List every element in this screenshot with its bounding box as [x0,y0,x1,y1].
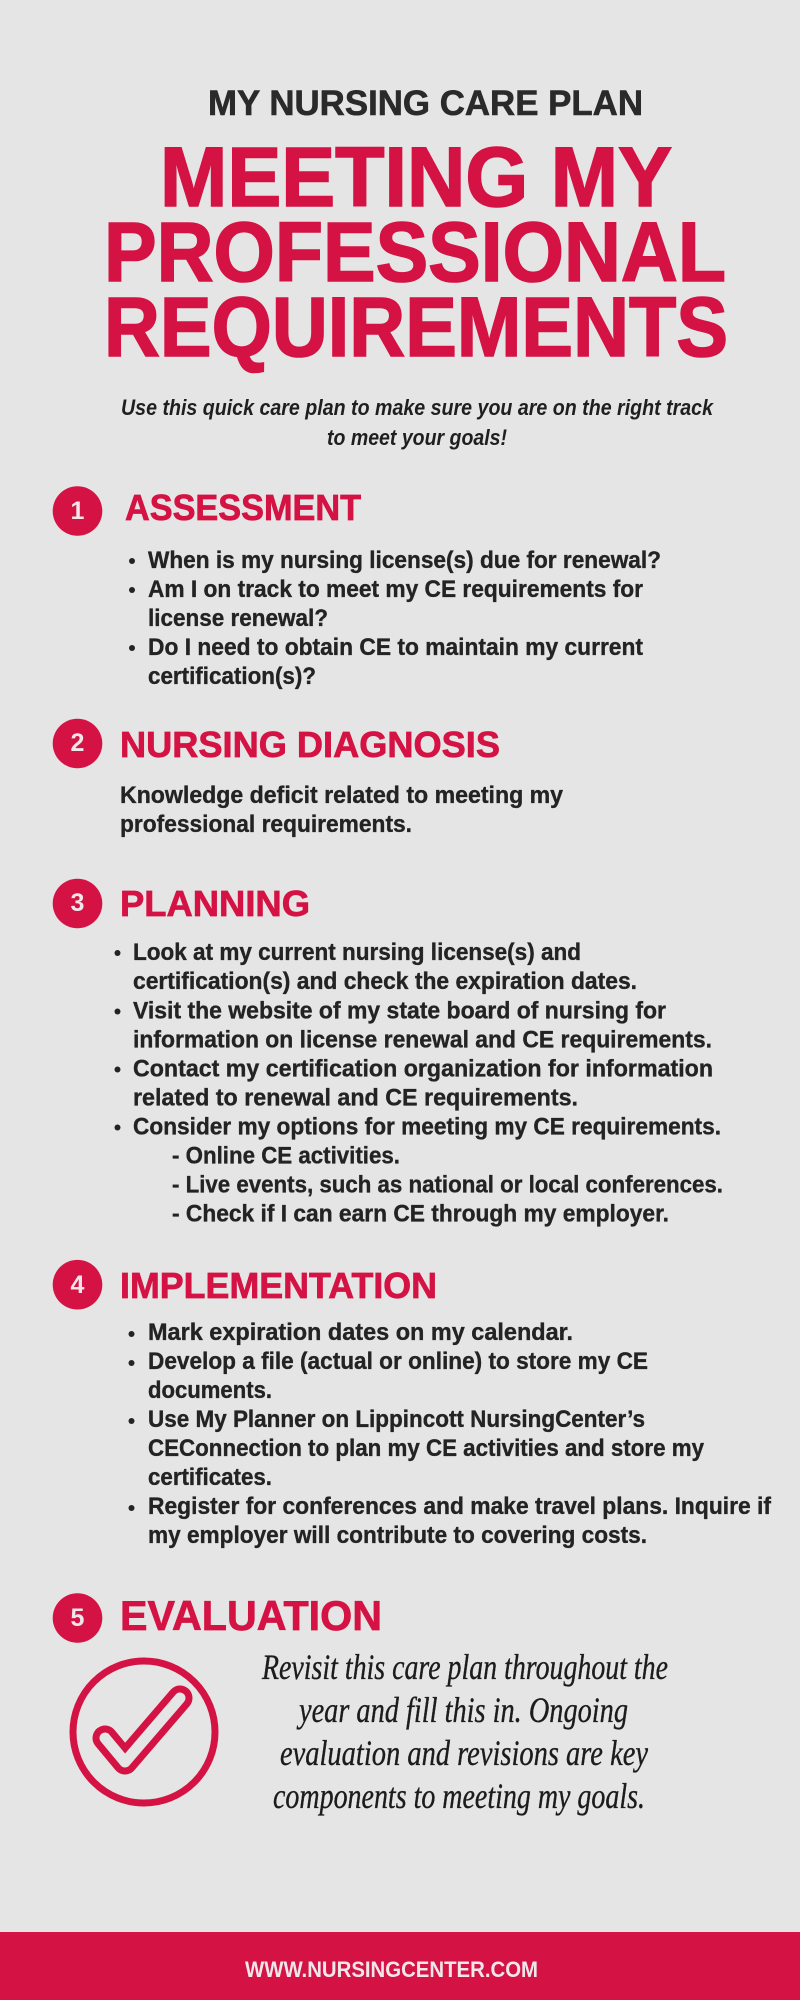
section 4: implementation [53,1260,772,1549]
evaluation script text: components to meeting my goals. [273,1776,645,1816]
number badge 1 [53,486,102,536]
heading: nursing diagnosis: NURSING DIAGNOSIS [120,724,500,765]
number badge 1: 1 [71,497,85,525]
header [104,84,728,450]
icon: check mark in circle [73,1661,215,1803]
diagnosis text: professional requirements. [120,811,412,838]
number badge 4 [53,1260,102,1309]
evaluation script text: Revisit this care plan throughout the [261,1647,668,1687]
number badge 3: 3 [71,889,84,917]
assessment bullet list: When is my nursing license(s) due for renewal? [148,547,661,574]
number badge 4: 4 [71,1271,85,1299]
section 1: assessment [53,486,661,690]
implementation bullet list: certificates. [148,1464,272,1491]
title: REQUIREMENTS [104,280,728,374]
assessment bullet list: Am I on track to meet my CE requirements for [148,576,643,603]
implementation bullet list: Mark expiration dates on my calendar. [148,1319,573,1346]
assessment bullet list [129,547,661,690]
planning bullet list: certification(s) and check the expiration dates. [133,968,637,995]
subtitle: my nursing care plan: MY NURSING CARE PLAN [208,84,643,123]
intro text [121,395,715,450]
implementation bullet list: Register for conferences and make travel plans. Inquire if [148,1493,772,1520]
footer band [0,1932,800,2000]
implementation bullet list [128,1319,772,1549]
assessment bullet list: license renewal? [148,605,328,632]
heading: planning: PLANNING [120,883,310,924]
number badge 2 [53,719,102,768]
section 2: nursing diagnosis [53,719,564,838]
planning bullet list: information on license renewal and CE requirements. [133,1026,712,1054]
section 3: planning [53,879,723,1228]
planning bullet list: Look at my current nursing license(s) and [133,939,581,966]
implementation bullet list: Develop a file (actual or online) to store my CE [148,1348,648,1375]
title: PROFESSIONAL [104,205,726,299]
number badge 2: 2 [71,729,84,757]
planning bullet list: Visit the website of my state board of nursing for [133,998,666,1024]
implementation bullet list: Use My Planner on Lippincott NursingCenter’s [148,1406,645,1433]
implementation bullet list: documents. [148,1377,272,1404]
planning bullet list: related to renewal and CE requirements. [133,1084,578,1112]
title: MEETING MY [160,130,672,224]
evaluation script text [261,1647,668,1816]
title [104,130,728,374]
assessment bullet list: certification(s)? [148,663,316,690]
heading: implementation: IMPLEMENTATION [120,1265,437,1306]
section 5: evaluation [53,1592,668,1816]
planning bullet list: Consider my options for meeting my CE requirements. [133,1114,721,1140]
number badge 5: 5 [71,1604,85,1632]
planning bullet list: Contact my certification organization for information [133,1056,713,1082]
number badge 3 [53,879,102,928]
footer url: WWW.NURSINGCENTER.COM [245,1957,538,1982]
evaluation script text: year and fill this in. Ongoing [297,1690,628,1730]
heading: assessment: ASSESSMENT [125,487,361,528]
diagnosis text: Knowledge deficit related to meeting my [120,782,564,809]
planning bullet list: - Live events, such as national or local conferences. [172,1172,723,1198]
planning bullet list [114,939,723,1228]
heading: evaluation: EVALUATION [120,1592,382,1639]
implementation bullet list: CEConnection to plan my CE activities and store my [148,1435,705,1462]
diagnosis text [120,782,564,838]
intro text: Use this quick care plan to make sure you are on the right track [121,395,715,420]
number badge 5 [53,1593,102,1643]
assessment bullet list: Do I need to obtain CE to maintain my current [148,634,643,661]
planning bullet list: - Check if I can earn CE through my employer. [172,1200,669,1228]
intro text: to meet your goals! [327,425,507,450]
planning bullet list: - Online CE activities. [172,1142,400,1170]
implementation bullet list: my employer will contribute to covering costs. [148,1522,647,1549]
evaluation script text: evaluation and revisions are key [280,1733,648,1773]
